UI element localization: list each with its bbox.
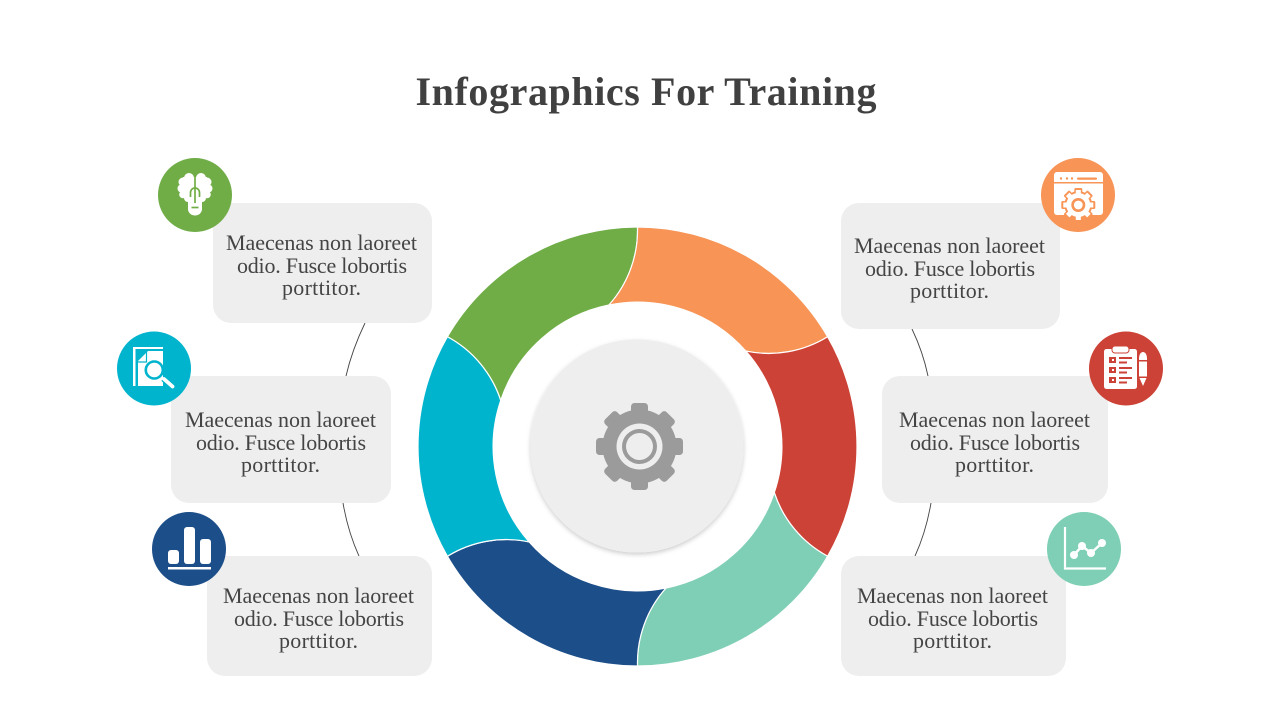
title: Infographics For Training — [416, 69, 876, 114]
icon: document search — [117, 332, 191, 406]
panel: middle right: odio. Fusce lobortis — [910, 430, 1080, 455]
panel: top left — [213, 203, 432, 323]
center disc — [530, 340, 744, 552]
panel: middle left: porttitor. — [241, 452, 320, 477]
panel: bottom left: Maecenas non laoreet — [223, 583, 414, 608]
segment: mint — [637, 493, 828, 666]
panel: middle left — [171, 376, 391, 503]
panel: top right: Maecenas non laoreet — [854, 233, 1045, 258]
segment: teal — [352, 337, 598, 588]
panel: bottom right: Maecenas non laoreet — [857, 583, 1048, 608]
panel: bottom left: odio. Fusce lobortis — [234, 606, 404, 631]
panel: top right — [841, 203, 1060, 329]
connector lines — [343, 323, 931, 556]
panel: middle right: porttitor. — [955, 452, 1034, 477]
panel: middle right: Maecenas non laoreet — [899, 407, 1090, 432]
icon: bar chart — [152, 512, 226, 586]
panel: bottom left: porttitor. — [279, 628, 358, 653]
panel: middle left: Maecenas non laoreet — [185, 407, 376, 432]
donut ring — [352, 172, 923, 720]
segment: orange — [582, 172, 828, 423]
panel: top left: odio. Fusce lobortis — [237, 253, 407, 278]
panel: bottom right: porttitor. — [913, 628, 992, 653]
icon: center gear — [596, 403, 683, 490]
panel: middle left: odio. Fusce lobortis — [196, 430, 366, 455]
segment: red — [677, 305, 923, 556]
segment: green — [447, 227, 638, 400]
panel: bottom right — [841, 556, 1066, 676]
panel: bottom left — [207, 556, 432, 676]
panel: top right: odio. Fusce lobortis — [865, 256, 1035, 281]
panel: middle right — [882, 376, 1108, 503]
icon: browser gear — [1041, 158, 1115, 232]
icon: checklist clipboard — [1089, 332, 1163, 406]
icon: brain bulb — [158, 158, 232, 232]
icon: line chart — [1047, 512, 1121, 586]
panel: bottom right: odio. Fusce lobortis — [868, 606, 1038, 631]
panel: top right: porttitor. — [910, 278, 989, 303]
panel: top left: porttitor. — [282, 275, 361, 300]
panel: top left: Maecenas non laoreet — [226, 230, 417, 255]
segment: navy — [447, 470, 693, 720]
